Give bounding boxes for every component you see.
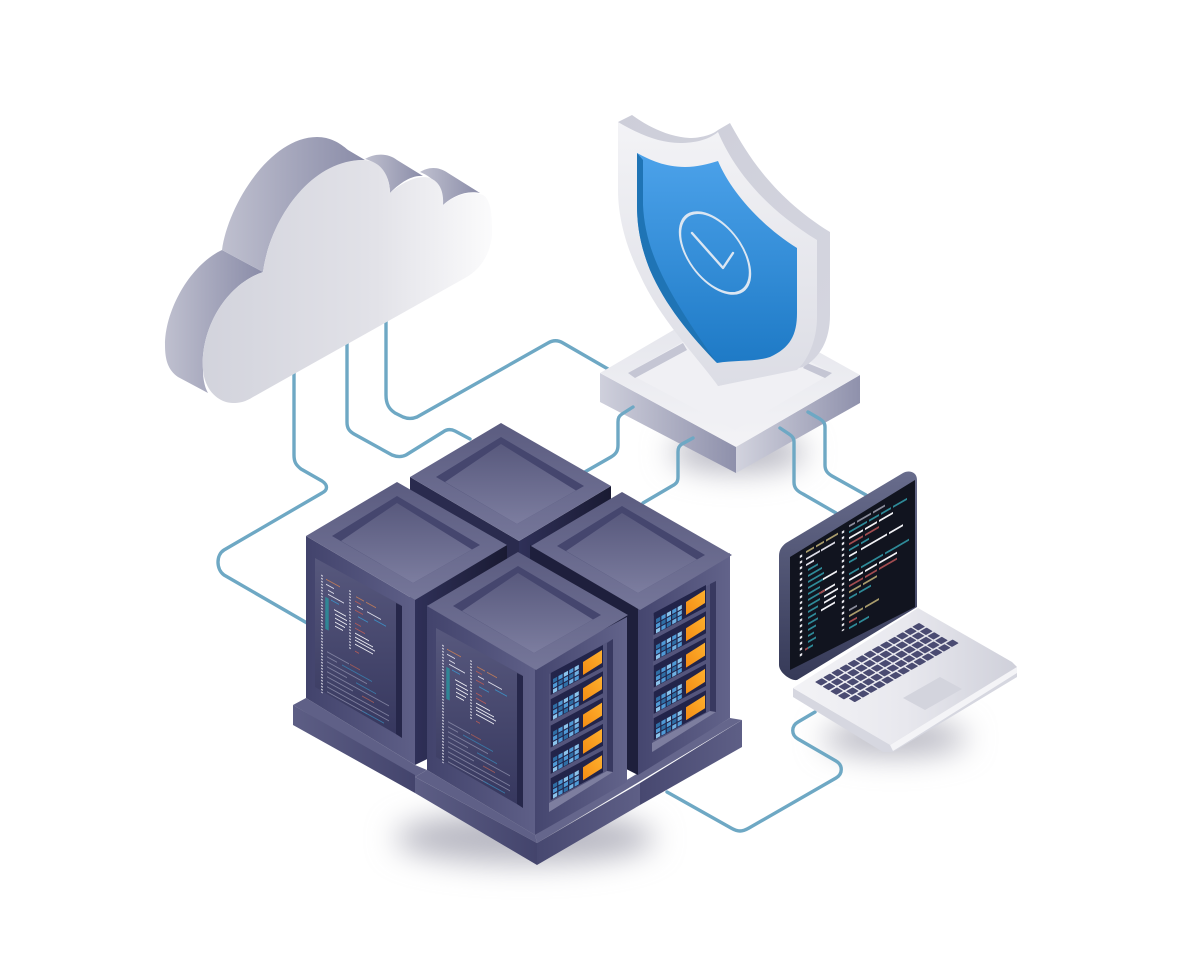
server: front [427, 552, 628, 835]
security shield [618, 115, 830, 386]
drive rack [549, 639, 613, 812]
cloud [165, 137, 492, 403]
code panel [436, 628, 523, 808]
server base [293, 698, 742, 865]
connector lines: cloud to servers and shield, server to laptop [218, 318, 841, 831]
trackpad [903, 677, 962, 710]
laptop [779, 471, 1017, 752]
server cluster [293, 423, 742, 865]
laptop screen [779, 471, 917, 680]
ground shadows [395, 432, 967, 864]
icon: check mark in circle [680, 198, 750, 308]
shield platform [600, 300, 860, 473]
code text lines [801, 492, 909, 657]
laptop base [793, 608, 1017, 752]
keyboard [815, 621, 959, 704]
connector lines: platform to servers and laptop [583, 407, 866, 513]
server: back [410, 423, 611, 661]
server: right [530, 492, 732, 775]
server: left [306, 482, 507, 765]
